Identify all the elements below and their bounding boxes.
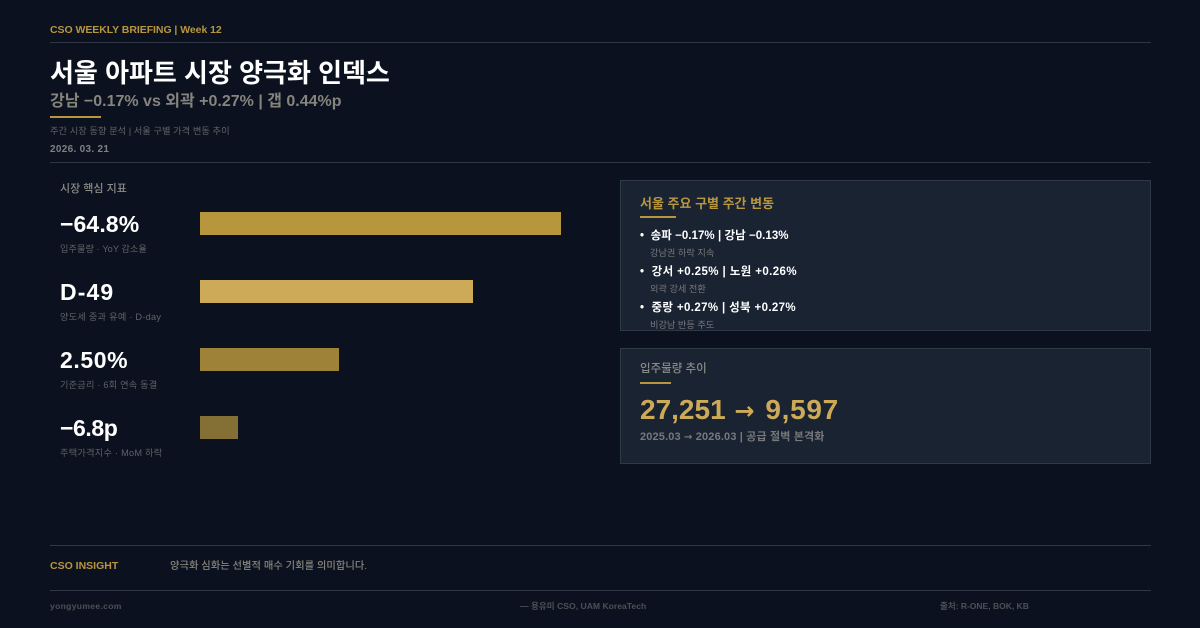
header label: CSO WEEKLY BRIEFING | Week 12 xyxy=(50,24,222,36)
metric value: 2.50%: 2.50% xyxy=(60,347,128,373)
description: 주간 시장 동향 분석 | 서울 구별 가격 변동 추이 xyxy=(50,126,230,136)
metric label: capital gains tax: 양도세 중과 유예 · D-day xyxy=(60,312,161,322)
item 1 note: 강남권 하락 지속 xyxy=(650,248,714,258)
item 1: • 송파 −0.17% | 강남 −0.13% xyxy=(640,230,789,242)
metric label: move-in volume: 입주물량 · YoY 감소율 xyxy=(60,244,147,254)
footer: author: — 용유미 CSO, UAM KoreaTech xyxy=(520,601,646,611)
insight text: 양극화 심화는 선별적 매수 기회를 의미합니다. xyxy=(170,561,367,572)
panel: move-in volume trend xyxy=(620,348,1151,464)
insight label: CSO INSIGHT xyxy=(50,560,118,572)
bar: 2.50% xyxy=(200,348,339,371)
footer: source: 출처: R-ONE, BOK, KB xyxy=(940,601,1029,611)
item 2 note: 외곽 강세 전환 xyxy=(650,284,706,294)
panel heading: 서울 주요 구별 주간 변동 xyxy=(640,196,774,211)
bar: D-49 xyxy=(200,280,473,303)
caption: 2025.03 → 2026.03 | 공급 절벽 본격화 xyxy=(640,431,825,443)
big number: 27,251 → 9,597 xyxy=(640,394,839,425)
panel heading: 입주물량 추이 xyxy=(640,363,707,375)
metric label: base rate: 기준금리 · 6회 연속 동결 xyxy=(60,380,157,390)
bar: -6.8p xyxy=(200,416,238,439)
metric label: housing price index: 주택가격지수 · MoM 하락 xyxy=(60,448,163,458)
section heading: market key indicators: 시장 핵심 지표 xyxy=(60,183,127,195)
bar: -64.8% xyxy=(200,212,561,235)
metric value: -6.8p: −6.8p xyxy=(60,415,117,441)
metric value: D-49: D-49 xyxy=(60,279,114,305)
title: 서울 아파트 시장 양극화 인덱스 xyxy=(50,58,390,88)
item 3: • 중랑 +0.27% | 성북 +0.27% xyxy=(640,302,796,314)
panel heading accent xyxy=(640,382,671,384)
date: 2026. 03. 21 xyxy=(50,144,109,155)
subtitle: 강남 −0.17% vs 외곽 +0.27% | 갭 0.44%p xyxy=(50,93,342,110)
title accent line xyxy=(50,116,101,118)
item 3 note: 비강남 반등 주도 xyxy=(650,320,714,330)
footer: site: yongyumee.com xyxy=(50,601,122,611)
item 2: • 강서 +0.25% | 노원 +0.26% xyxy=(640,266,797,278)
panel heading accent xyxy=(640,216,676,218)
metric value: -64.8%: −64.8% xyxy=(60,211,139,237)
panel: Seoul district weekly change xyxy=(620,180,1151,331)
